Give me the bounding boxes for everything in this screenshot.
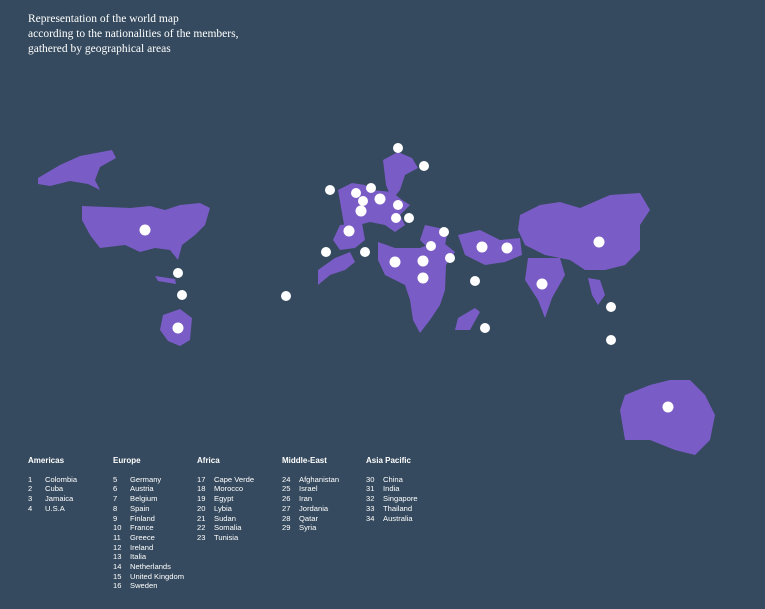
legend: asia pacific: Thailand [383, 504, 412, 513]
legend: europe: 6 [113, 484, 117, 493]
legend: africa: Morocco [214, 484, 243, 493]
legend: americas [28, 456, 78, 513]
legend: middle east: 24 [282, 475, 290, 484]
legend: asia pacific: 32 [366, 494, 374, 503]
legend: americas: U.S.A [45, 504, 65, 513]
legend: middle east [282, 456, 339, 532]
legend: americas: 3 [28, 494, 32, 503]
legend: europe [113, 456, 184, 590]
legend: europe: 11 [113, 533, 121, 542]
legend: europe: 9 [113, 514, 117, 523]
legend: africa: 22 [197, 523, 205, 532]
legend: middle east: 25 [282, 484, 290, 493]
legend: americas: Colombia [45, 475, 77, 484]
legend: middle east: 29 [282, 523, 290, 532]
legend: americas: 2 [28, 484, 32, 493]
legend: europe: 5 [113, 475, 117, 484]
legend: americas: Jamaica [45, 494, 73, 503]
legend: asia pacific: India [383, 484, 399, 493]
legend: europe: Belgium [130, 494, 157, 503]
legend: europe: Greece [130, 533, 155, 542]
legend: europe: 14 [113, 562, 121, 571]
legend: africa: Sudan [214, 514, 236, 523]
legend: asia pacific: Singapore [383, 494, 418, 503]
legend: middle east: Syria [299, 523, 316, 532]
title: gathered by geographical areas [28, 43, 171, 55]
legend: africa: 18 [197, 484, 205, 493]
legend: asia pacific: 34 [366, 514, 374, 523]
legend: middle east: Middle-East [282, 456, 327, 465]
legend: americas: Americas [28, 456, 64, 465]
legend: africa: 20 [197, 504, 205, 513]
legend: asia pacific: Asia Pacific [366, 456, 411, 465]
legend: middle east: 27 [282, 504, 290, 513]
legend: africa: Lybia [214, 504, 232, 513]
legend: africa: Egypt [214, 494, 233, 503]
legend: europe: Netherlands [130, 562, 171, 571]
legend: europe: 7 [113, 494, 117, 503]
legend: middle east: Iran [299, 494, 312, 503]
legend: africa: 23 [197, 533, 205, 542]
legend: middle east: Israel [299, 484, 318, 493]
title: Representation of the world map [28, 13, 179, 25]
legend: europe: Europe [113, 456, 141, 465]
legend: europe: 10 [113, 523, 121, 532]
legend: middle east: Jordania [299, 504, 328, 513]
markers [140, 143, 674, 412]
legend: europe: Ireland [130, 543, 153, 552]
legend: middle east: Qatar [299, 514, 318, 523]
legend: europe: France [130, 523, 154, 532]
legend: europe: 15 [113, 572, 121, 581]
legend: africa: Africa [197, 456, 220, 465]
legend: africa: 21 [197, 514, 205, 523]
legend: africa: Cape Verde [214, 475, 254, 484]
title [28, 13, 238, 55]
legend: middle east: Afghanistan [299, 475, 339, 484]
legend: europe: Sweden [130, 581, 157, 590]
legend: europe: United Kingdom [130, 572, 184, 581]
title: according to the nationalities of the members, [28, 28, 238, 40]
legend: europe: 8 [113, 504, 117, 513]
legend: europe: Austria [130, 484, 154, 493]
legend: europe: 16 [113, 581, 121, 590]
legend: europe: 13 [113, 552, 121, 561]
legend: europe: Spain [130, 504, 149, 513]
legend: europe: 12 [113, 543, 121, 552]
legend: americas: Cuba [45, 484, 63, 493]
legend: middle east: 26 [282, 494, 290, 503]
legend: europe: Finland [130, 514, 155, 523]
legend: asia pacific: China [383, 475, 403, 484]
legend: africa: 19 [197, 494, 205, 503]
legend: americas: 4 [28, 504, 32, 513]
legend: asia pacific: 31 [366, 484, 374, 493]
legend: africa: Tunisia [214, 533, 238, 542]
legend: africa [197, 456, 254, 542]
legend: middle east: 28 [282, 514, 290, 523]
legend: europe: Italia [130, 552, 146, 561]
legend: asia pacific [366, 456, 418, 523]
legend: asia pacific: 30 [366, 475, 374, 484]
legend: asia pacific: Australia [383, 514, 413, 523]
legend: asia pacific: 33 [366, 504, 374, 513]
legend: americas: 1 [28, 475, 32, 484]
legend: africa: 17 [197, 475, 205, 484]
legend: africa: Somalia [214, 523, 241, 532]
legend: europe: Germany [130, 475, 161, 484]
